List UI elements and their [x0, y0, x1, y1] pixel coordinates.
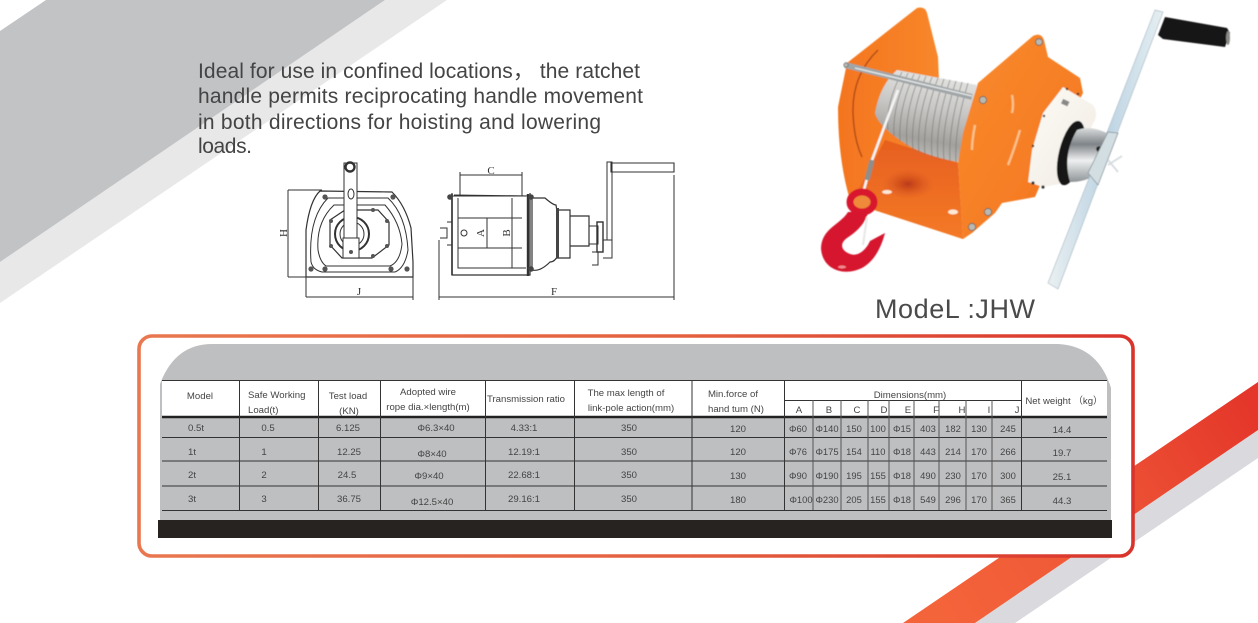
- description text: handle permits reciprocating handle movement: [198, 85, 643, 108]
- row 3t: 549: [920, 494, 936, 505]
- row 1t: 12.19:1: [508, 447, 540, 458]
- table header labels: Safe Working: [248, 390, 305, 401]
- handle bar: [1048, 10, 1163, 289]
- handle bracket: [1088, 132, 1118, 185]
- table header labels: link-pole action(mm): [588, 403, 674, 414]
- table header labels: Model: [187, 391, 213, 402]
- row 3t: [188, 494, 1071, 508]
- row 3t: Φ230: [815, 494, 839, 505]
- row 2t: [188, 470, 1071, 483]
- row 3t: 3: [261, 494, 267, 505]
- row 0.5t: Φ15: [893, 423, 911, 434]
- row 0.5t: 120: [730, 424, 746, 435]
- row 0.5t: 245: [1000, 423, 1016, 434]
- row 0.5t: Φ60: [789, 423, 807, 434]
- description text: [198, 60, 643, 158]
- row 3t: 180: [730, 495, 746, 506]
- row 2t: 170: [971, 470, 987, 481]
- table header labels: H: [959, 405, 966, 416]
- row 2t: Φ9×40: [414, 471, 444, 482]
- table header labels: Adopted wire: [400, 387, 456, 398]
- technical drawing: front view of winch: [288, 162, 413, 300]
- background: red and grey diagonal bands bottom right: [903, 382, 1258, 623]
- table header labels: The max length of: [588, 388, 665, 399]
- row 2t: 490: [920, 470, 936, 481]
- row 1t: 1t: [188, 447, 196, 458]
- label B: B: [501, 229, 513, 237]
- row 0.5t: [188, 423, 1072, 436]
- row 1t: 19.7: [1053, 448, 1071, 459]
- row 3t: 365: [1000, 494, 1016, 505]
- row 1t: 214: [945, 446, 961, 457]
- row 0.5t: 0.5: [261, 423, 275, 434]
- row 0.5t: 130: [971, 423, 987, 434]
- row 1t: 120: [730, 447, 746, 458]
- label H: H: [278, 229, 290, 237]
- row 1t: 1: [261, 447, 267, 458]
- specification panel frame: [139, 336, 1133, 556]
- label F: F: [551, 286, 557, 298]
- black seal ring: [1051, 118, 1091, 188]
- row 0.5t: Φ140: [815, 423, 839, 434]
- table header background: [162, 380, 1107, 417]
- table header labels: Net weight （kg）: [1025, 395, 1103, 407]
- wire drum: [875, 70, 977, 162]
- row 2t: Φ18: [893, 470, 911, 481]
- black grip: [1158, 17, 1230, 47]
- row 2t: 155: [870, 470, 886, 481]
- table header labels: E: [905, 405, 911, 416]
- row 0.5t: 350: [621, 423, 637, 434]
- table header labels: C: [854, 405, 861, 416]
- row 2t: 2t: [188, 470, 196, 481]
- row 2t: 230: [945, 470, 961, 481]
- row 3t: 350: [621, 494, 637, 505]
- row 1t: Φ8×40: [417, 449, 447, 460]
- row 0.5t: 100: [870, 423, 886, 434]
- row 2t: Φ190: [815, 470, 839, 481]
- row 1t: 110: [871, 446, 885, 457]
- row 3t: 3t: [188, 494, 196, 505]
- table header labels: (KN): [339, 406, 359, 417]
- background: grey diagonal bands top left: [0, 0, 447, 303]
- table header labels: Transmission ratio: [487, 394, 565, 405]
- row 0.5t: 14.4: [1053, 425, 1072, 436]
- technical drawing: side view of winch: [439, 162, 674, 300]
- label J: J: [357, 286, 362, 298]
- bottom black bar: [158, 520, 1112, 538]
- row 3t: Φ100: [789, 494, 813, 505]
- table header labels: Load(t): [248, 405, 278, 416]
- row 3t: 296: [945, 494, 961, 505]
- row 2t: 2: [261, 470, 267, 481]
- row 2t: 130: [730, 471, 746, 482]
- row 2t: 350: [621, 470, 637, 481]
- row 3t: 155: [870, 494, 886, 505]
- model name: ModeL :JHW: [875, 294, 1036, 324]
- table header labels: B: [826, 405, 832, 416]
- row 1t: 170: [971, 446, 987, 457]
- row 2t: 195: [846, 470, 862, 481]
- row 1t: Φ18: [893, 446, 911, 457]
- table header labels: Dimensions(mm): [874, 390, 946, 401]
- specification table: [158, 344, 1112, 538]
- steel hub: [1067, 128, 1107, 182]
- row 3t: 44.3: [1053, 496, 1071, 507]
- description text: loads.: [198, 135, 252, 158]
- row 1t: 443: [920, 446, 936, 457]
- row 1t: 350: [621, 447, 637, 458]
- row 2t: 300: [1000, 470, 1016, 481]
- row 1t: Φ175: [815, 446, 839, 457]
- table header labels: Test load: [329, 391, 367, 402]
- row 0.5t: 150: [846, 423, 862, 434]
- row 0.5t: Φ6.3×40: [417, 423, 455, 434]
- row 1t: 154: [846, 446, 862, 457]
- row 3t: 205: [846, 494, 862, 505]
- rear drum flange edge: [853, 50, 878, 157]
- base plate shading: [858, 140, 963, 239]
- row 0.5t: 403: [920, 423, 936, 434]
- row 2t: 22.68:1: [508, 470, 540, 481]
- row 3t: 29.16:1: [508, 494, 540, 505]
- table header labels: A: [796, 405, 803, 416]
- row 1t: Φ76: [789, 446, 807, 457]
- table header labels: rope dia.×length(m): [386, 402, 470, 413]
- row 0.5t: 6.125: [336, 423, 360, 434]
- row 3t: Φ12.5×40: [411, 497, 453, 508]
- table rules: [162, 380, 1107, 510]
- rear plate and base: [838, 8, 963, 239]
- row 1t: 266: [1000, 446, 1016, 457]
- tie rod: [845, 65, 972, 97]
- row 1t: 12.25: [337, 447, 361, 458]
- table grey backing: [160, 344, 1111, 520]
- description text: Ideal for use in confined locations， the ratchet: [198, 60, 640, 83]
- hook rope: [862, 90, 898, 197]
- row 3t: 170: [971, 494, 987, 505]
- row 0.5t: 182: [945, 423, 961, 434]
- white gearbox boss: [1028, 87, 1096, 187]
- plate bolts: [844, 39, 1042, 231]
- table header labels: D: [881, 405, 888, 416]
- table header labels: J: [1015, 405, 1020, 416]
- row 2t: 25.1: [1053, 472, 1071, 483]
- table header labels: F: [933, 405, 939, 416]
- row 2t: 24.5: [338, 470, 356, 481]
- table header labels: hand tum (N): [708, 404, 764, 415]
- row 2t: Φ90: [789, 470, 807, 481]
- description text: in both directions for hoisting and lowering: [198, 111, 601, 134]
- table header labels: Min.force of: [708, 389, 758, 400]
- label A: A: [475, 229, 487, 237]
- table header labels: I: [988, 405, 990, 416]
- red hook: [821, 192, 885, 272]
- row 0.5t: 4.33:1: [511, 423, 537, 434]
- row 3t: Φ18: [893, 494, 911, 505]
- row 3t: 36.75: [337, 494, 361, 505]
- row 0.5t: 0.5t: [188, 423, 204, 434]
- label C: C: [487, 165, 495, 177]
- product illustration: orange winch: [821, 8, 1230, 289]
- front plate: [958, 35, 1083, 239]
- table header labels: [187, 387, 1103, 417]
- row 1t: [188, 446, 1071, 460]
